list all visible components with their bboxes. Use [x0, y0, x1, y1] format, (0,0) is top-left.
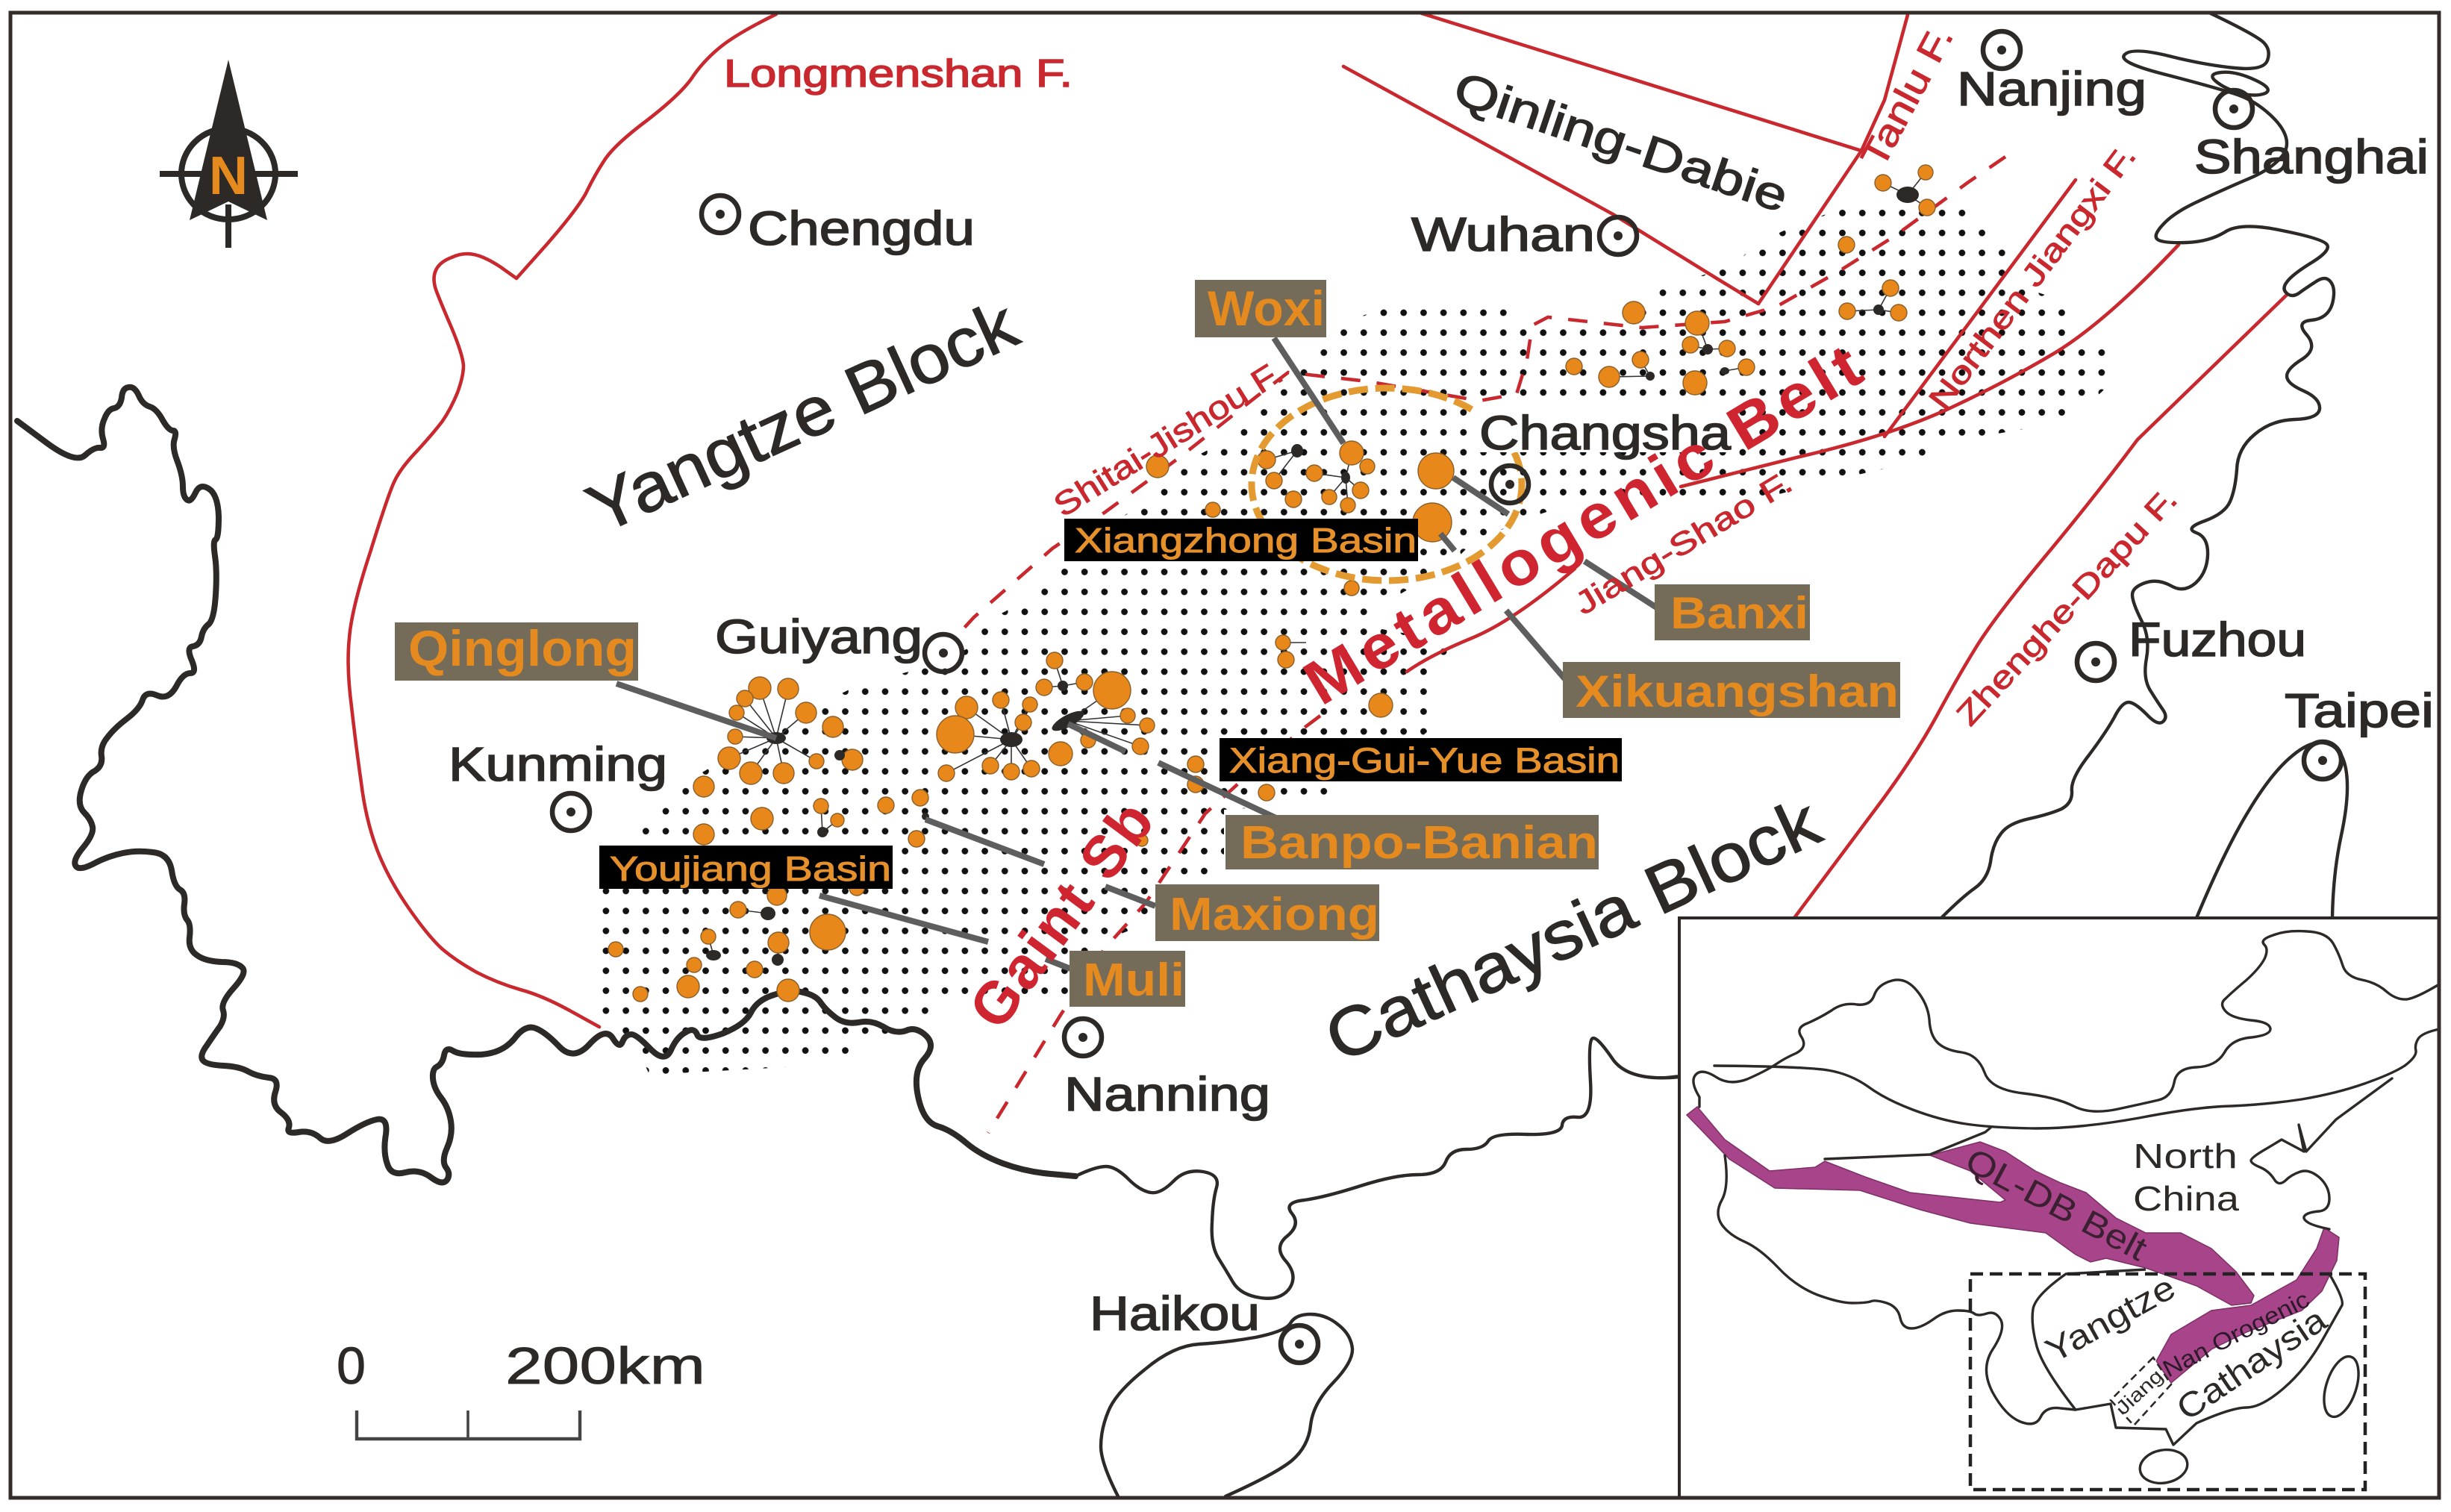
city: Guiyang: Guiyang [715, 610, 922, 663]
white halo behind Changsha label [1472, 409, 1735, 452]
block label: Yangtze Block: Yangtze Block [576, 286, 1029, 548]
basin label: Youjiang Basin: Youjiang Basin [610, 849, 891, 888]
fault label: Shitai-Jishou F.: Shitai-Jishou F. [1047, 354, 1290, 524]
deposit label: Banxi: Banxi [1670, 588, 1808, 638]
city: Shanghai [2194, 90, 2429, 184]
fault label: Tanlu F.: Tanlu F. [1852, 19, 1961, 174]
western and southern national border [17, 387, 1075, 1182]
fault label: Longmenshan F.: Longmenshan F. [724, 52, 1072, 96]
inset: Jiangnan orogenic belt shape [2156, 1228, 2339, 1383]
city: Nanjing [1957, 31, 2146, 116]
inset map panel [1664, 918, 2439, 1498]
city: Taipei [2285, 684, 2434, 779]
fault label: Northen Jiangxi F.: Northen Jiangxi F. [1922, 139, 2143, 416]
scale bar [337, 1337, 705, 1439]
deposit label: Muli: Muli [1083, 955, 1184, 1006]
inset: Yangtze label: Yangtze [2039, 1267, 2182, 1370]
scale bar: 200km [505, 1337, 705, 1395]
connector lines of ore clusters [708, 172, 1927, 960]
block label: Cathaysia Block: Cathaysia Block [1314, 784, 1832, 1077]
coastline [1075, 1038, 1679, 1299]
stippled metallogenic belt area [593, 205, 2112, 1075]
city: Nanjing: Nanjing [1957, 62, 2146, 116]
city: Wuhan: Wuhan [1411, 207, 1595, 261]
Yangtze mouth island [2212, 72, 2268, 96]
inset: dashed study area box [1970, 1274, 2365, 1490]
city: Kunming: Kunming [449, 737, 667, 791]
city: Chengdu [702, 196, 975, 255]
city: Changsha: Changsha [1479, 406, 1731, 460]
Hainan island [1101, 1314, 1352, 1496]
city: Fuzhou: Fuzhou [2129, 613, 2306, 666]
fault label: Zhenghe-Dapu F.: Zhenghe-Dapu F. [1949, 481, 2184, 732]
city: Chengdu: Chengdu [748, 202, 975, 255]
inset: Nan Orogenic label: Nan Orogenic [2158, 1286, 2314, 1382]
belt label: Gaint Sb: Gaint Sb [956, 787, 1168, 1040]
Taiwan island [2196, 743, 2347, 918]
region label: Qinling-Dabie: Qinling-Dabie [1448, 63, 1794, 222]
city: Changsha [1479, 406, 1731, 503]
fault label: Jiang-Shao F.: Jiang-Shao F. [1568, 464, 1798, 622]
basin label: Youjiang Basin [599, 846, 893, 889]
inset: QL-DB Belt label: QL-DB Belt [1959, 1140, 2154, 1268]
deposit label: Banpo-Banian: Banpo-Banian [1240, 817, 1598, 869]
fault lines [349, 13, 2287, 1133]
inset: QL-DB belt shape [1687, 1107, 2254, 1305]
belt label: Metallogenic Belt: Metallogenic Belt [1292, 328, 1878, 718]
city: Guiyang [715, 610, 962, 672]
north arrow: N [209, 146, 248, 206]
city: Nanning: Nanning [1064, 1067, 1270, 1121]
eastern coastline [1941, 13, 2334, 918]
inset: Hainan and Taiwan islands [2138, 1352, 2365, 1487]
dashed circle around Xiangzhong ore district [1252, 388, 1522, 581]
city: Nanning [1064, 1019, 1270, 1121]
orange ore deposits [608, 165, 1935, 1002]
deposit label: Qinglong: Qinglong [408, 620, 637, 677]
deposit label: Maxiong: Maxiong [1170, 889, 1379, 940]
north arrow [160, 60, 298, 248]
inset: North China label: North [2133, 1137, 2238, 1175]
black ore cluster centres [706, 187, 1919, 966]
inset: Jiang label: Jiang [2111, 1364, 2167, 1419]
city: Kunming [449, 737, 667, 831]
inset: Cathaysia label: Cathaysia [2170, 1299, 2334, 1428]
city: Taipei: Taipei [2285, 684, 2434, 737]
deposit label: Xikuangshan: Xikuangshan [1576, 666, 1899, 716]
city: Haikou: Haikou [1090, 1287, 1260, 1340]
scale bar: 0 [337, 1337, 366, 1395]
basin label: Xiang-Gui-Yue Basin: Xiang-Gui-Yue Basin [1229, 740, 1620, 780]
inset: North China label [2133, 1137, 2239, 1218]
inset: China outline [1664, 931, 2439, 1445]
city: Haikou [1090, 1287, 1318, 1363]
city: Wuhan [1411, 207, 1637, 261]
city: Shanghai: Shanghai [2194, 130, 2429, 184]
inset: North China label: China [2133, 1179, 2239, 1218]
deposit label: Woxi: Woxi [1208, 281, 1325, 336]
basin label: Xiangzhong Basin: Xiangzhong Basin [1075, 521, 1417, 560]
leader lines from deposits to labels [616, 338, 1658, 969]
city: Fuzhou [2077, 613, 2306, 681]
